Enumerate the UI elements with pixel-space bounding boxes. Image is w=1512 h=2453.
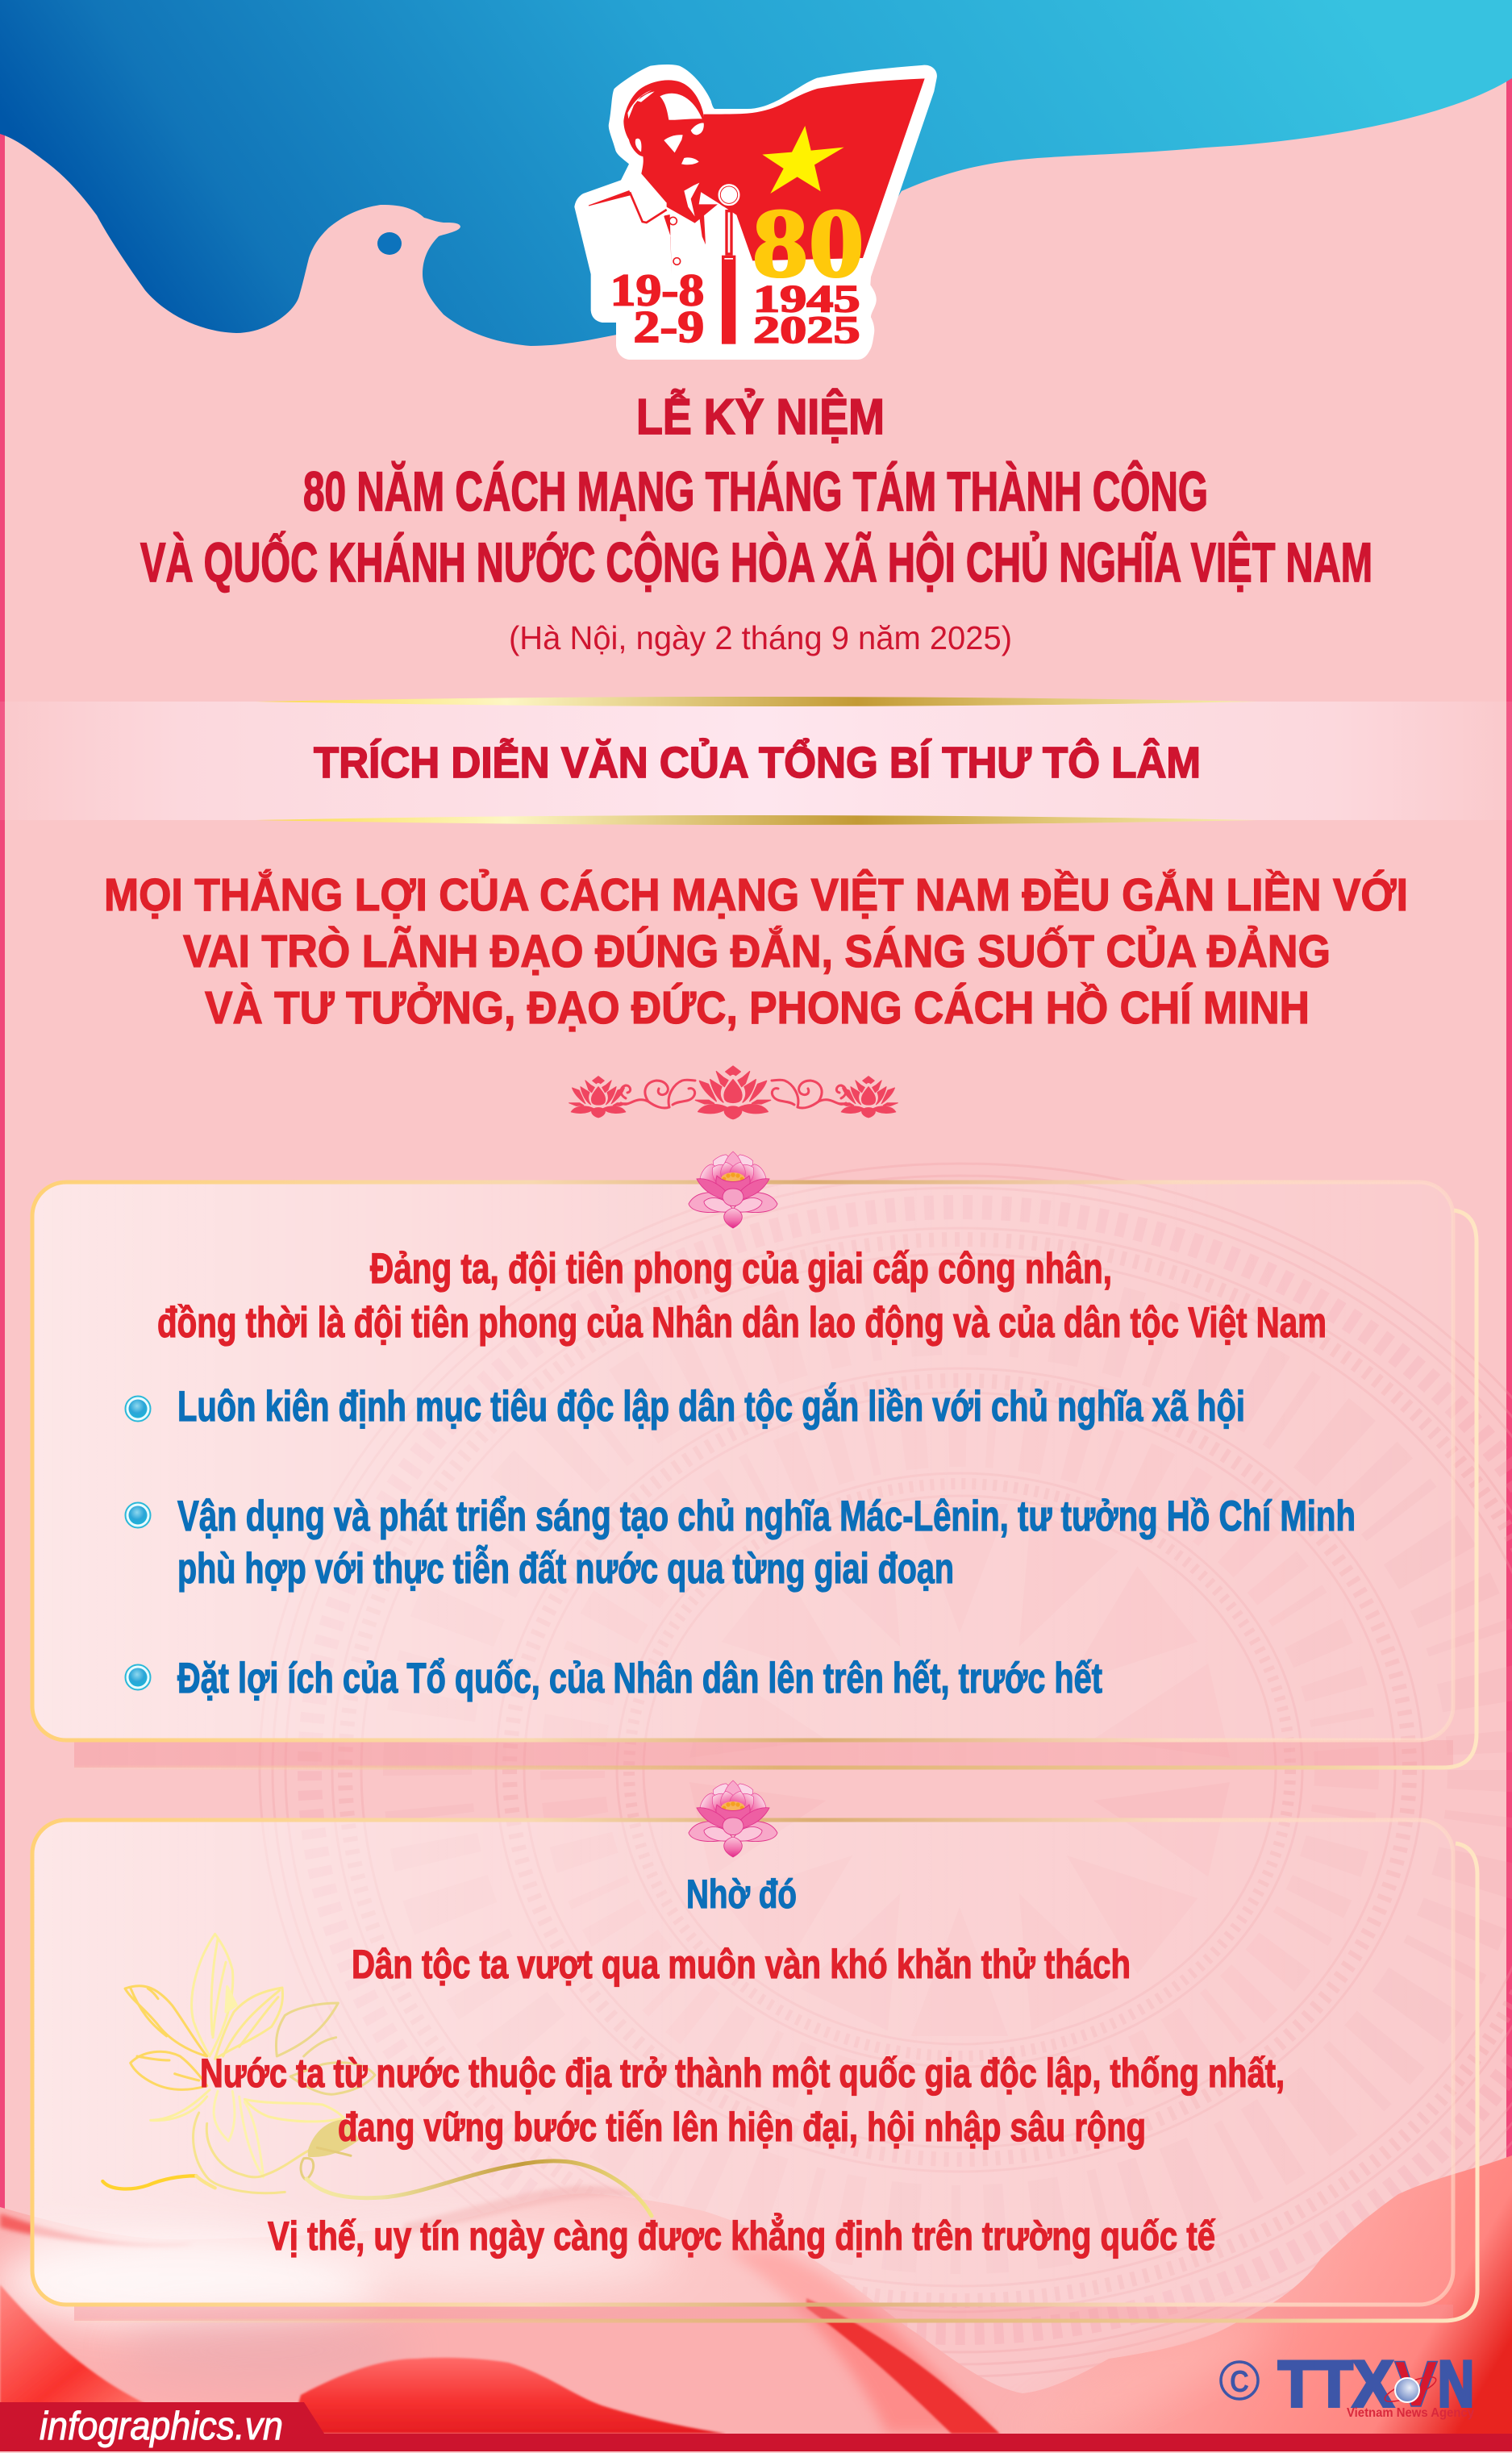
date line: (Hà Nội, ngày 2 tháng 9 năm 2025) [509,619,1012,656]
logo dates: 2025 [753,310,860,352]
TTXVN logo: V [1394,2348,1438,2421]
bullet list: phù hợp với thực tiễn đất nước qua từng giai đoạn [177,1544,954,1593]
bullet icon 2 [126,1503,150,1527]
bullet list: Đặt lợi ích của Tổ quốc, của Nhân dân lên trên hết, trước hết [177,1655,1102,1702]
speech banner [0,697,1512,825]
footer site label: infographics.vn [40,2405,283,2448]
logo portrait of President [589,80,718,274]
logo dates: 1945 [753,279,860,321]
bronze drum watermark [260,1164,1512,2376]
panel: party vanguard [32,1182,1477,1768]
icon: lotus top panel [689,1152,777,1228]
TTXVN logo: Vietnam News Agency [1347,2406,1474,2420]
logo white backing [574,65,937,360]
sky shape with dove silhouette [0,0,1512,347]
logo yellow star [762,126,844,194]
logo dates [610,265,860,352]
main statement: VAI TRÒ LÃNH ĐẠO ĐÚNG ĐẮN, SÁNG SUỐT CỦA ĐẢNG [183,925,1331,977]
main statement: MỌI THẮNG LỢI CỦA CÁCH MẠNG VIỆT NAM ĐỀU GẮN LIỀN VỚI [104,868,1408,921]
logo red flag [699,78,925,260]
main statement [104,868,1408,1034]
panel text: Dân tộc ta vượt qua muôn vàn khó khăn thử thách [352,1942,1131,1987]
panel heading: Đảng ta, đội tiên phong của giai cấp công nhân, [370,1245,1112,1293]
panel heading [157,1245,1327,1347]
title block [140,389,1372,593]
collar and coat lines [631,173,667,223]
microphone [717,183,741,344]
gold flourish [306,2161,652,2216]
title line 1: LỄ KỶ NIỆM [636,389,885,445]
gold lotus line art [102,1934,375,2193]
TTXVN logo: TTX [1278,2348,1393,2421]
panel text [200,1872,1285,2259]
bullet icon 1 [126,1397,150,1421]
main statement: VÀ TƯ TƯỞNG, ĐẠO ĐỨC, PHONG CÁCH HỒ CHÍ MINH [205,981,1310,1034]
right edge stripe [1506,73,1512,2161]
icon: lotus bottom panel [689,1780,777,1857]
panel: results [32,1820,1477,2321]
TTXVN logo [1278,2348,1474,2421]
silk ribbon at page bottom [0,2155,1512,2453]
copyright mark: C [1230,2365,1249,2399]
left edge stripe [0,129,5,2214]
logo number 80: 80 [752,188,864,298]
banner heading: TRÍCH DIỄN VĂN CỦA TỔNG BÍ THƯ TÔ LÂM [314,738,1201,787]
TTXVN logo: N [1438,2348,1474,2421]
logo dates: 19-8 [610,265,704,315]
bullet icon 3 [126,1664,150,1690]
logo: 80 years emblem [574,65,937,360]
dove eye [377,232,402,255]
panel text: đang vững bước tiến lên hiện đại, hội nhập sâu rộng [338,2105,1146,2150]
logo dates: 2-9 [633,302,704,352]
footer bar [0,2402,1512,2451]
panel text: Vị thế, uy tín ngày càng được khẳng định trên trường quốc tế [268,2213,1215,2259]
copyright mark [1221,2362,1258,2399]
bullet list [126,1382,1356,1702]
panel text: Nhờ đó [686,1872,797,1917]
lotus ornament divider [569,1066,898,1119]
